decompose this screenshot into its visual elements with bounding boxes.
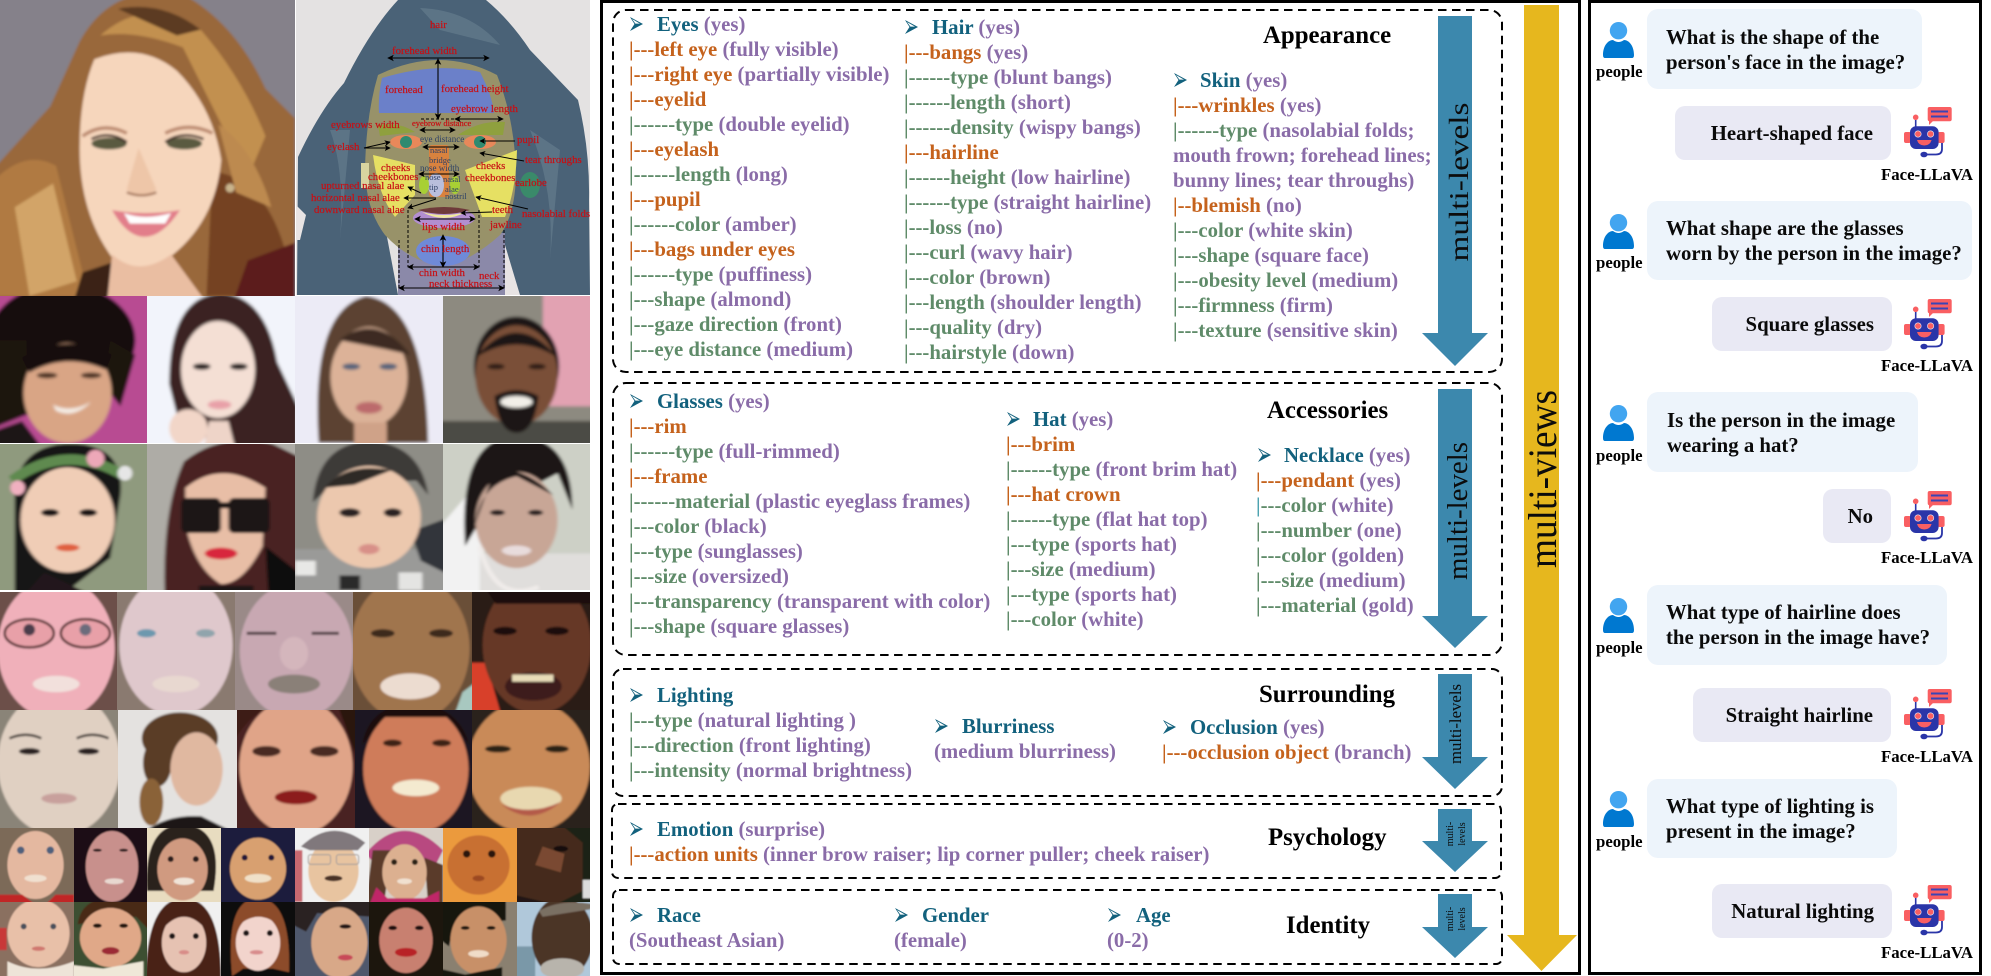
answer bubble 4: Straight hairline xyxy=(1726,704,1873,727)
photo: blonde woman portrait xyxy=(0,0,295,296)
list: hair: |---hairline xyxy=(904,141,999,164)
heading: psychology: Psychology xyxy=(1268,824,1387,851)
icon: people xyxy=(1596,22,1643,81)
list: necklace: |---pendant (yes) xyxy=(1256,469,1401,492)
list: hair: |------type (straight hairline) xyxy=(904,191,1151,214)
icon: Face-LLaVA robot: Face-LLaVA xyxy=(1881,165,1973,184)
list: hat: |---type (sports hat) xyxy=(1006,583,1177,606)
question bubble 2: worn by the person in the image? xyxy=(1666,242,1962,265)
question bubble 5: What type of lighting is xyxy=(1666,795,1874,818)
list: necklace: |---material (gold) xyxy=(1256,594,1414,617)
mask labels: chin width xyxy=(419,267,465,279)
arrow: multi-levels surrounding: multi-levels xyxy=(1446,684,1465,764)
list: hair: |---curl (wavy hair) xyxy=(904,241,1073,264)
list: hat xyxy=(1006,408,1237,631)
icon: people: people xyxy=(1596,832,1643,851)
list: glasses: Glasses (yes) xyxy=(657,390,770,413)
list: eyes: |---eye distance (medium) xyxy=(629,338,853,361)
list: eyes: |---eyelash xyxy=(629,138,719,161)
photo row 1: Asian woman xyxy=(147,296,295,443)
list: necklace: |---size (medium) xyxy=(1256,569,1406,592)
list: hair: |------density (wispy bangs) xyxy=(904,116,1141,139)
arrow: multi-levels identity: levels xyxy=(1457,907,1468,931)
mask labels: eyelash xyxy=(327,141,360,153)
face skin mask xyxy=(365,60,516,266)
answer bubble 4 xyxy=(1693,688,1891,742)
question bubble 4: What type of hairline does xyxy=(1666,601,1901,624)
list: necklace: Necklace (yes) xyxy=(1284,444,1411,467)
photo row 4: pale woman neutral xyxy=(0,710,118,828)
list: eyes: |---bags under eyes xyxy=(629,238,795,261)
mask labels: eyebrow length xyxy=(451,103,518,115)
photo row 3: woman squinting xyxy=(235,592,353,710)
list: glasses: |---color (black) xyxy=(629,515,767,538)
photo row 4: laughing woman xyxy=(472,710,590,828)
list: skin: mouth frown; forehead lines; xyxy=(1173,144,1432,167)
list: gender xyxy=(894,904,989,952)
list: age xyxy=(1107,904,1171,952)
list: eyes: |------type (puffiness) xyxy=(629,263,812,286)
mask labels: nose xyxy=(425,172,441,182)
photo row 5: woman dark background xyxy=(74,828,147,902)
photo row 3: laughing boy xyxy=(472,592,590,710)
list: lighting: |---direction (front lighting) xyxy=(629,734,871,757)
photo row 5: girl with pink hat xyxy=(369,828,443,902)
photo row 2: girl with flower wreath xyxy=(0,444,147,590)
photo row 6: woman with red lips smiling xyxy=(369,902,443,976)
icon: people: people xyxy=(1596,638,1643,657)
neck mask xyxy=(398,233,505,295)
eyebrow masks xyxy=(378,124,415,136)
list: emotion xyxy=(629,818,1210,866)
panel: dialogue xyxy=(1590,2,1980,974)
list: age: (0-2) xyxy=(1107,929,1149,952)
panel: psychology xyxy=(612,804,1501,878)
list: hat: |------type (flat hat top) xyxy=(1006,508,1208,531)
icon: Face-LLaVA robot xyxy=(1881,885,1973,962)
arrow: multi-levels surrounding xyxy=(1422,674,1488,789)
icon: people: people xyxy=(1596,253,1643,272)
photo row 6: girl with auburn hair xyxy=(221,902,295,976)
icon: Face-LLaVA robot: Face-LLaVA xyxy=(1881,747,1973,766)
list: necklace: |---color (white) xyxy=(1256,494,1394,517)
list: lighting xyxy=(629,684,912,782)
photo row 2: woman in veil xyxy=(443,444,590,590)
list: eyes: |------color (amber) xyxy=(629,213,797,236)
list: hair: |---loss (no) xyxy=(904,216,1003,239)
list: blurriness: (medium blurriness) xyxy=(934,740,1116,763)
exchange 5 xyxy=(1596,779,1973,962)
dashed frame: surrounding xyxy=(613,669,1502,796)
icon: Face-LLaVA robot: Face-LLaVA xyxy=(1881,356,1973,375)
list: hair: |---length (shoulder length) xyxy=(904,291,1142,314)
ear masks xyxy=(520,172,540,198)
list: skin xyxy=(1173,69,1432,342)
list: blurriness xyxy=(934,715,1116,763)
list: hair: |------height (low hairline) xyxy=(904,166,1130,189)
panel: surrounding xyxy=(613,669,1502,796)
list: skin: |--blemish (no) xyxy=(1173,194,1302,217)
mask labels: hair xyxy=(430,19,447,31)
hair highlights xyxy=(330,8,560,260)
arrow: multi-levels identity: multi- xyxy=(1445,907,1456,931)
photo row 5: dark-skinned face close-up xyxy=(517,828,590,902)
list: hat: |---hat crown xyxy=(1006,483,1121,506)
list: occlusion: Occlusion (yes) xyxy=(1190,716,1325,739)
icon: people xyxy=(1596,405,1643,465)
mask labels: upturned nasal alae xyxy=(321,180,405,192)
arrow: multi-levels accessories: multi-levels xyxy=(1442,442,1474,580)
heading: identity: Identity xyxy=(1286,912,1371,939)
list: hair: |---quality (dry) xyxy=(904,316,1042,339)
list: skin: Skin (yes) xyxy=(1200,69,1287,92)
list: glasses xyxy=(629,390,990,638)
nose mask xyxy=(429,145,449,197)
answer bubble 2: Square glasses xyxy=(1746,313,1874,336)
photo row 1: man with curly hair xyxy=(0,296,147,443)
list: hair: |------type (blunt bangs) xyxy=(904,66,1112,89)
arrow: multi-views xyxy=(1507,5,1577,971)
photo row 3: pale child xyxy=(117,592,235,710)
answer bubble 5: Natural lighting xyxy=(1731,900,1875,923)
list: eyes: |------type (double eyelid) xyxy=(629,113,850,136)
exchange 4 xyxy=(1596,585,1973,766)
panel: attribute hierarchy xyxy=(602,2,1580,974)
mask labels: eyebrow distance xyxy=(412,118,471,128)
list: hair: |---color (brown) xyxy=(904,266,1051,289)
mask labels: cheeks xyxy=(381,162,410,174)
photo row 6: woman side view xyxy=(295,902,369,976)
list: glasses: |---rim xyxy=(629,415,687,438)
arrow: multi-levels psychology xyxy=(1422,809,1488,872)
cheek masks xyxy=(373,155,415,217)
list: age: Age xyxy=(1136,904,1171,927)
panel frame xyxy=(1590,2,1980,974)
answer bubble 3: No xyxy=(1848,505,1873,528)
photo row 5: woman curly dark hair xyxy=(221,828,295,902)
mask labels: tear throughs xyxy=(525,154,582,166)
mask labels: forehead width xyxy=(392,45,458,57)
mask labels: eyebrows width xyxy=(331,119,400,131)
list: hair: |---hairstyle (down) xyxy=(904,341,1074,364)
measurement arrows xyxy=(388,58,504,288)
list: hat: Hat (yes) xyxy=(1033,408,1113,431)
list: lighting: |---type (natural lighting ) xyxy=(629,709,856,732)
photo row 3: girl with glasses xyxy=(0,592,117,710)
list: glasses: |---shape (square glasses) xyxy=(629,615,849,638)
list: eyes: |---right eye (partially visible) xyxy=(629,63,890,86)
icon: people xyxy=(1596,791,1643,851)
mask labels: cheeks xyxy=(476,160,505,172)
question bubble 1: person's face in the image? xyxy=(1666,51,1905,74)
mask labels: nasolabial folds xyxy=(522,208,590,220)
dashed frame: appearance xyxy=(613,10,1502,372)
list: hat: |---size (medium) xyxy=(1006,558,1156,581)
exchange 3 xyxy=(1596,392,1973,567)
icon: Face-LLaVA robot xyxy=(1881,689,1973,766)
heading: appearance: Appearance xyxy=(1263,22,1391,49)
answer bubble 5 xyxy=(1712,884,1892,938)
photo row 5: older woman xyxy=(0,828,74,902)
list: hat: |---brim xyxy=(1006,433,1075,456)
background notches xyxy=(296,205,520,295)
mask labels: teeth xyxy=(492,204,514,216)
heading: surrounding: Surrounding xyxy=(1259,681,1396,708)
list: emotion: |---action units (inner brow raiser; lip corner puller; cheek raiser) xyxy=(629,843,1210,866)
question bubble 5 xyxy=(1647,779,1897,858)
question bubble 4 xyxy=(1647,585,1947,665)
arrow: multi-levels appearance xyxy=(1422,16,1488,366)
photo row 1: young woman with long hair xyxy=(295,296,443,443)
list: glasses: |------material (plastic eyeglass frames) xyxy=(629,490,970,513)
list: hair: Hair (yes) xyxy=(932,16,1020,39)
photo row 5: baby in orange light xyxy=(443,828,517,902)
question bubble 4: the person in the image have? xyxy=(1666,626,1930,649)
mask labels: nasal xyxy=(443,174,461,184)
icon: people: people xyxy=(1596,446,1643,465)
list: glasses: |---frame xyxy=(629,465,707,488)
photo row 4: woman with red lips xyxy=(237,710,355,828)
mask labels: nostril xyxy=(445,191,467,201)
lips mask xyxy=(413,211,475,228)
list: skin: |---firmness (firm) xyxy=(1173,294,1333,317)
icon: Face-LLaVA robot: Face-LLaVA xyxy=(1881,548,1973,567)
mask labels: tip xyxy=(429,182,438,192)
list: skin: bunny lines; tear throughs) xyxy=(1173,169,1414,192)
photo row 3: smiling dark-skinned woman xyxy=(353,592,472,710)
mask labels: nose width xyxy=(420,163,460,173)
mask labels: lips width xyxy=(422,221,465,233)
mask labels: neck thickness xyxy=(429,278,492,290)
photo row 5: woman with dark bob xyxy=(147,828,221,902)
mask labels: downward nasal alae xyxy=(314,204,405,216)
question bubble 3 xyxy=(1647,392,1918,472)
list: eyes: Eyes (yes) xyxy=(657,13,745,36)
mask labels: pupil xyxy=(517,134,539,146)
arrow: multi-levels appearance: multi-levels xyxy=(1444,102,1474,262)
photo row 4: woman smiling dark background xyxy=(355,710,472,828)
forehead mask xyxy=(379,68,494,113)
exchange 2 xyxy=(1596,201,1973,375)
list: skin: |---obesity level (medium) xyxy=(1173,269,1398,292)
list: hat: |---type (sports hat) xyxy=(1006,533,1177,556)
list: race xyxy=(629,904,785,952)
photo row 2: woman in sunglasses xyxy=(147,444,295,590)
mask labels: eye distance xyxy=(420,134,464,144)
photo row 1: man with goatee xyxy=(443,296,590,443)
icon: Face-LLaVA robot: Face-LLaVA xyxy=(1881,943,1973,962)
answer bubble 2 xyxy=(1712,297,1892,351)
list: necklace: |---color (golden) xyxy=(1256,544,1404,567)
photo row 2: boy in plaid shirt xyxy=(295,444,443,590)
mask labels: nasal xyxy=(430,145,448,155)
photo row 6: girl with bangs xyxy=(147,902,221,976)
list: glasses: |---size (oversized) xyxy=(629,565,789,588)
dashed frame: accessories xyxy=(613,383,1502,655)
icon: Face-LLaVA robot xyxy=(1881,107,1973,184)
list: eyes: |---gaze direction (front) xyxy=(629,313,842,336)
photo row 6: baby xyxy=(0,902,74,976)
mask labels: jawline xyxy=(489,219,522,231)
question bubble 1: What is the shape of the xyxy=(1666,26,1879,49)
icon: Face-LLaVA robot xyxy=(1881,491,1973,567)
mask labels: forehead height xyxy=(441,83,508,95)
arrow: multi-levels psychology: multi- xyxy=(1445,822,1456,846)
photo row 5: boy with cap and glasses xyxy=(295,828,369,902)
mask labels: cheekbones xyxy=(368,171,418,183)
panel: appearance xyxy=(613,10,1502,372)
answer bubble 1: Heart-shaped face xyxy=(1711,122,1873,145)
mask labels: earlobe xyxy=(515,177,547,189)
mask labels: forehead xyxy=(385,84,423,96)
mask labels: bridge xyxy=(429,155,451,165)
heading: accessories: Accessories xyxy=(1267,397,1389,424)
photo row 4: girl in profile xyxy=(118,710,237,828)
list: eyes: |---left eye (fully visible) xyxy=(629,38,839,61)
exchange 1 xyxy=(1596,9,1973,184)
panel: identity xyxy=(613,890,1502,964)
answer bubble 3 xyxy=(1823,489,1891,543)
photo row 6: old man with white beard xyxy=(517,902,590,976)
dashed frame: identity xyxy=(613,890,1502,964)
list: race: (Southeast Asian) xyxy=(629,929,785,952)
list: skin: |---color (white skin) xyxy=(1173,219,1353,242)
list: glasses: |---transparency (transparent with color) xyxy=(629,590,990,613)
hair mask xyxy=(297,0,590,295)
panel: accessories xyxy=(613,383,1502,655)
list: hat: |---color (white) xyxy=(1006,608,1144,631)
list: necklace: |---number (one) xyxy=(1256,519,1402,542)
list: skin: |---shape (square face) xyxy=(1173,244,1369,267)
mask labels: neck xyxy=(479,270,500,282)
question bubble 5: present in the image? xyxy=(1666,820,1856,843)
arrow: multi-views: multi-views xyxy=(1520,390,1565,568)
mask labels xyxy=(311,19,590,290)
list: hair xyxy=(904,16,1151,364)
list: glasses: |---type (sunglasses) xyxy=(629,540,803,563)
list: eyes: |---shape (almond) xyxy=(629,288,791,311)
icon: people xyxy=(1596,598,1643,657)
question bubble 1 xyxy=(1647,9,1922,89)
photo row 6: crying toddler xyxy=(74,902,147,976)
chin mask xyxy=(416,236,470,266)
list: hair: |---bangs (yes) xyxy=(904,41,1028,64)
question bubble 2: What shape are the glasses xyxy=(1666,217,1904,240)
icon: people: people xyxy=(1596,62,1643,81)
icon: people xyxy=(1596,214,1643,272)
list: glasses: |------type (full-rimmed) xyxy=(629,440,840,463)
list: blurriness: Blurriness xyxy=(962,715,1054,738)
list: hair: |------length (short) xyxy=(904,91,1071,114)
list: occlusion: |---occlusion object (branch) xyxy=(1162,741,1412,764)
list: skin: |---wrinkles (yes) xyxy=(1173,94,1321,117)
list: eyes: |---pupil xyxy=(629,188,701,211)
mask labels: alae xyxy=(445,184,459,194)
list: lighting: Lighting xyxy=(657,684,734,707)
list: emotion: Emotion (surprise) xyxy=(657,818,825,841)
mask labels: horizontal nasal alae xyxy=(311,192,400,204)
list: eyes: |---eyelid xyxy=(629,88,707,111)
question bubble 3: Is the person in the image xyxy=(1667,409,1895,432)
arrow: multi-levels identity xyxy=(1422,894,1488,958)
question bubble 2 xyxy=(1647,201,1972,280)
list: occlusion xyxy=(1162,716,1412,764)
panel: face photo grid xyxy=(0,0,597,976)
question bubble 3: wearing a hat? xyxy=(1667,434,1799,457)
photo: annotated face parsing mask xyxy=(296,0,590,295)
arrow: multi-levels accessories xyxy=(1422,389,1488,648)
mask labels: chin length xyxy=(421,243,470,255)
list: skin: |---texture (sensitive skin) xyxy=(1173,319,1398,342)
mask labels: cheekbones xyxy=(465,172,515,184)
list: eyes xyxy=(629,13,890,361)
list: skin: |------type (nasolabial folds; xyxy=(1173,119,1414,142)
list: eyes: |------length (long) xyxy=(629,163,788,186)
icon: Face-LLaVA robot xyxy=(1881,299,1973,375)
answer bubble 1 xyxy=(1675,106,1891,160)
list: lighting: |---intensity (normal brightness) xyxy=(629,759,912,782)
dashed frame: psychology xyxy=(612,804,1501,878)
eye masks xyxy=(390,135,422,149)
panel frame xyxy=(602,2,1580,974)
list: hat: |------type (front brim hat) xyxy=(1006,458,1237,481)
list: race: Race xyxy=(657,904,701,927)
list: gender: (female) xyxy=(894,929,967,952)
list: necklace xyxy=(1256,444,1414,617)
arrow: multi-levels psychology: levels xyxy=(1457,822,1468,846)
photo row 6: man smiling xyxy=(443,902,517,976)
list: gender: Gender xyxy=(922,904,989,927)
